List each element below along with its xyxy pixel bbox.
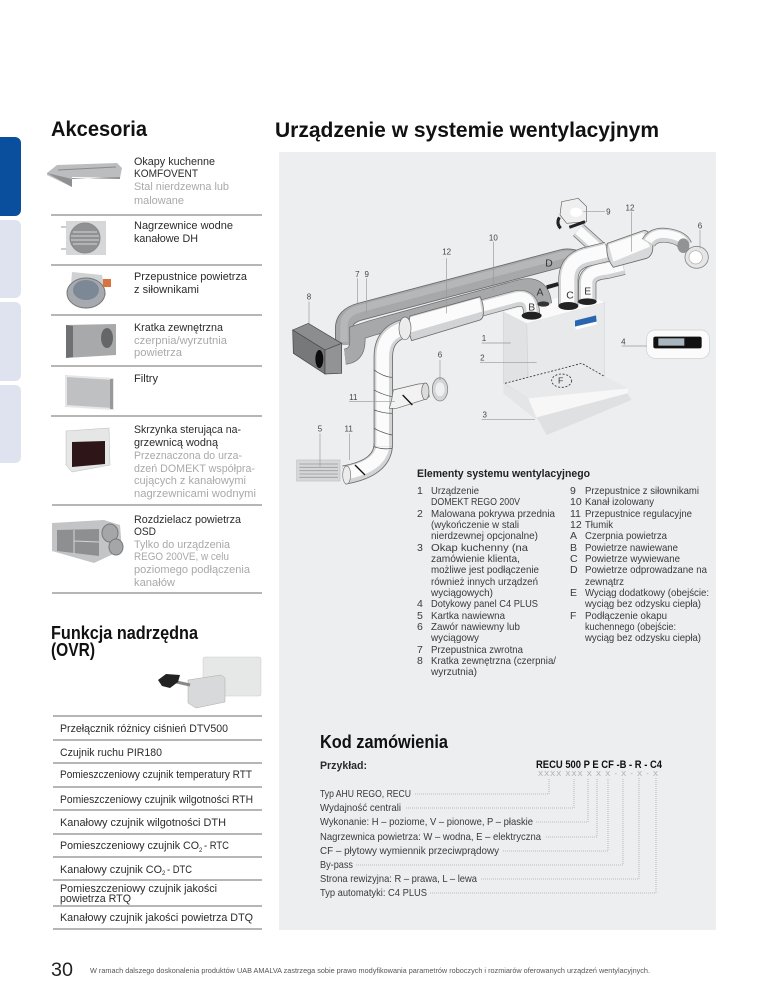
sensor list [53, 716, 262, 929]
legend left column: 8 [417, 655, 423, 667]
ventilation system diagram [293, 198, 709, 484]
sensor list: - RTC [204, 840, 229, 852]
item: hood: Okapy kuchenne [134, 156, 215, 168]
control panel 4 [647, 330, 709, 358]
diagram labels: 11 [349, 393, 358, 402]
legend left column: DOMEKT REGO 200V [431, 496, 520, 508]
diagram labels: D [545, 259, 553, 270]
sensor list: Pomieszczeniowy czujnik wilgotności RTH [60, 794, 253, 806]
sensor list: Kanałowy czujnik jakości powietrza DTQ [60, 912, 253, 924]
code descriptions: Wykonanie: H – poziome, V – pionowe, P – płaskie [320, 816, 533, 828]
legend right column: D [570, 564, 578, 576]
legend left column: 7 [417, 644, 423, 656]
legend right column: 10 [570, 496, 582, 508]
legend right column: F [570, 610, 576, 622]
legend left column: (wykończenie w stali [431, 519, 519, 531]
grey duct A [345, 284, 558, 357]
sensor list: Kanałowy czujnik CO [60, 864, 162, 876]
diagram labels: E [584, 286, 591, 297]
external grille 8 [293, 323, 342, 374]
legend left column: 2 [417, 508, 423, 520]
legend right column: Czerpnia powietrza [585, 530, 667, 542]
sensor list: Pomieszczeniowy czujnik CO [60, 840, 199, 852]
legend left column: zamówienie klienta, [431, 553, 520, 565]
item: hood: Stal nierdzewna lub [134, 181, 229, 193]
legend left column: Zawór nawiewny lub [431, 621, 520, 633]
item: damper: z siłownikami [134, 284, 199, 296]
legend right column: wyciąg bez odzysku ciepła) [584, 598, 701, 610]
damper 9 top [558, 198, 587, 228]
legend left column: Okap kuchenny (na [431, 542, 528, 554]
sensor list: Kanałowy czujnik wilgotności DTH [60, 817, 226, 829]
diagram labels: 8 [307, 292, 312, 301]
legend right column: kuchennego (obejście: [585, 621, 676, 633]
code mask: XXXX XXX X X X - X - X - X [538, 769, 658, 778]
item: hood: malowane [134, 195, 184, 207]
supply grille 5 [297, 460, 340, 481]
heading: OVR: Funkcja nadrzędna [51, 623, 199, 643]
item: water heater: kanałowe DH [134, 233, 198, 245]
code descriptions: Wydajność centrali [320, 802, 401, 814]
item: control box: Przeznaczona do urza- [134, 450, 242, 462]
example code: RECU 500 P E CF -B - R - C4 [536, 759, 663, 771]
diagram labels: 1 [482, 334, 487, 343]
diagram labels: 6 [438, 351, 443, 360]
footer note: W ramach dalszego doskonalenia produktów UAB AMALVA zastrzega sobie prawo modyfikowania parametrów roboczych i rozmiarów oferowanych urządzeń wentylacyjnych. [90, 966, 650, 975]
sensor list: 2 [162, 871, 166, 877]
legend left column: możliwe jest podłączenie [431, 564, 539, 576]
example label: Przykład: [320, 760, 367, 772]
diagram labels: 10 [489, 233, 498, 242]
item: external grille: czerpnia/wyrzutnia [134, 335, 228, 347]
sensor list: powietrza RTQ [60, 893, 131, 905]
legend left column: 4 [417, 598, 423, 610]
legend left column: wyciągowy [430, 632, 480, 644]
panel: system diagram background [279, 152, 716, 930]
legend right column: Przepustnice regulacyjne [585, 508, 692, 520]
legend left column: Malowana pokrywa przednia [431, 508, 555, 520]
page number: 30 [51, 960, 73, 981]
item: water heater [61, 220, 233, 255]
valves 6 [432, 246, 708, 401]
item: control box: grzewnicą wodną [134, 437, 219, 449]
item: air distributor [52, 514, 251, 589]
legend right column: Powietrze wywiewane [585, 553, 680, 565]
sensor list: Pomieszczeniowy czujnik jakości [60, 883, 217, 895]
order code heading: Kod zamówienia [320, 732, 449, 752]
legend right column: E [570, 587, 577, 599]
item: damper: Przepustnice powietrza [134, 271, 248, 283]
code descriptions: Nagrzewnica powietrza: W – wodna, E – elektryczna [320, 831, 541, 843]
legend left column: Urządzenie [431, 485, 479, 497]
sensor list: Pomieszczeniowy czujnik temperatury RTT [60, 769, 252, 781]
diagram labels: 6 [698, 221, 703, 230]
diagram labels: 7 [355, 270, 360, 279]
diagram labels: 12 [442, 247, 452, 256]
legend right column: zewnątrz [585, 576, 624, 588]
legend left column: 6 [417, 621, 423, 633]
legend left column: 3 [417, 542, 423, 554]
code descriptions: By-pass [320, 859, 353, 871]
legend right column: 9 [570, 485, 576, 497]
legend right column: Wyciąg dodatkowy (obejście: [585, 587, 709, 599]
legend right column: Przepustnice z siłownikami [585, 485, 699, 497]
diagram labels: 2 [480, 353, 485, 362]
code descriptions: Typ automatyki: C4 PLUS [320, 887, 427, 899]
heading: Akcesoria: Akcesoria [51, 118, 147, 141]
diagram labels: 4 [621, 337, 626, 346]
item: control box: cujących z kanałowymi [134, 475, 246, 487]
item: hood: KOMFOVENT [134, 168, 198, 180]
sensor list: Przełącznik różnicy ciśnień DTV500 [60, 723, 228, 735]
heading: OVR [51, 623, 199, 660]
leader lines [309, 212, 700, 467]
diagram labels: 5 [318, 425, 323, 434]
diagram labels: F [558, 375, 563, 385]
heading: system: Urządzenie w systemie wentylacyjnym [275, 119, 659, 142]
item: control box [66, 424, 256, 500]
diagram labels: 3 [482, 411, 487, 420]
legend right column: C [570, 553, 578, 565]
item: external grille [66, 322, 228, 359]
legend right column: A [570, 530, 577, 542]
legend right column: wyciąg bez odzysku ciepła) [584, 632, 701, 644]
item: air distributor: Rozdzielacz powietrza [134, 514, 242, 526]
legend right column: Powietrze nawiewane [585, 542, 678, 554]
item: hood [47, 156, 229, 207]
legend right column: Podłączenie okapu [585, 610, 667, 622]
white supply duct and silencer [343, 297, 532, 484]
legend: system elements [417, 468, 709, 678]
sensor list: 2 [199, 848, 203, 854]
legend left column: Kratka zewnętrzna (czerpnia/ [431, 655, 556, 667]
legend left column: również innych urządzeń [431, 576, 538, 588]
legend left column: 1 [417, 485, 423, 497]
diagram labels: A [537, 287, 544, 298]
item: filters [66, 373, 159, 409]
white extract ducts C and E [568, 230, 689, 305]
item: external grille: powietrza [134, 347, 183, 359]
heading: OVR: (OVR) [51, 640, 95, 660]
OVR devices image [158, 657, 261, 708]
legend left column [417, 485, 556, 678]
legend left column: nierdzewnej opcjonalne) [431, 530, 538, 542]
item: air distributor: kanałów [134, 577, 175, 589]
grey insulated duct D [344, 255, 580, 345]
legend left column: Kartka nawiewna [431, 610, 505, 622]
kitchen hood [503, 363, 632, 435]
legend right column: 11 [570, 508, 581, 520]
item: external grille: Kratka zewnętrzna [134, 322, 224, 334]
legend left column: wyrzutnia) [430, 666, 477, 678]
item: water heater: Nagrzewnice wodne [134, 220, 233, 232]
duct collars [522, 298, 597, 320]
diagram labels: 9 [606, 207, 611, 216]
code descriptions: Strona rewizyjna: R – prawa, L – lewa [320, 873, 477, 885]
item: air distributor: Tylko do urządzenia [134, 539, 231, 551]
code descriptions: Typ AHU REGO, RECU [320, 788, 411, 800]
diagram labels: 11 [345, 425, 353, 434]
diagram labels: B [528, 302, 535, 313]
panel: accessories list [47, 156, 262, 593]
legend right column: Tłumik [585, 519, 614, 531]
code leaders [356, 778, 656, 893]
legend right column: Powietrze odprowadzane na [585, 564, 707, 576]
item: air distributor: poziomego podłączenia [134, 564, 251, 576]
legend left column: Przepustnica zwrotna [431, 644, 523, 656]
item: air distributor: REGO 200VE, w celu [134, 551, 229, 563]
item: control box: nagrzewnicami wodnymi [134, 488, 256, 500]
code descriptions [320, 788, 541, 899]
legend left column: Dotykowy panel C4 PLUS [431, 598, 538, 610]
diagram labels: 12 [626, 203, 635, 212]
legend right column: Kanał izolowany [585, 496, 655, 508]
sensor list: - DTC [167, 864, 192, 876]
legend right column: 12 [570, 519, 582, 531]
code descriptions: CF – płytowy wymiennik przeciwprądowy [320, 845, 500, 857]
chapter tabs [0, 137, 21, 463]
sensor list: Czujnik ruchu PIR180 [60, 747, 162, 759]
order code section [320, 732, 663, 899]
legend right column [570, 485, 709, 644]
item: damper [67, 271, 248, 309]
legend left column: 5 [417, 610, 423, 622]
device unit [503, 292, 604, 398]
diagram labels [307, 203, 703, 434]
item: filters: Filtry [134, 373, 159, 385]
legend right column: B [570, 542, 577, 554]
item: air distributor: OSD [134, 526, 156, 538]
legend heading: Elementy systemu wentylacyjnego [417, 468, 590, 480]
item: control box: dzeń DOMEKT współpra- [134, 463, 255, 475]
legend left column: wyciągowych) [430, 587, 493, 599]
diagram labels: 9 [364, 270, 369, 279]
item: control box: Skrzynka sterująca na- [134, 424, 241, 436]
diagram labels: C [566, 291, 574, 302]
